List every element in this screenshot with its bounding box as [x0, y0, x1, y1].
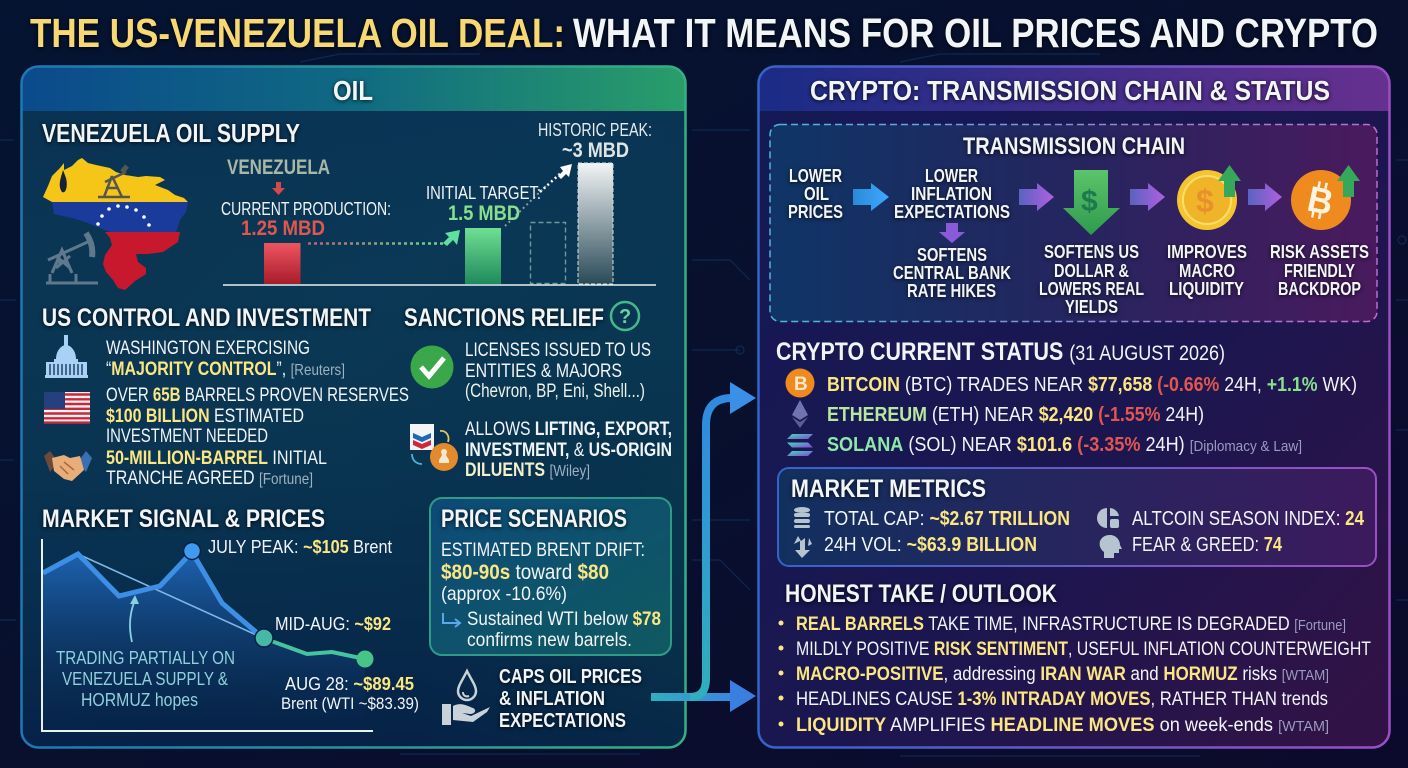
arrow: purple 2 [1130, 183, 1165, 211]
icon: bitcoin small: B [794, 374, 808, 395]
value: 3 mbd: ~3 MBD [562, 139, 629, 162]
text: majority control: “MAJORITY CONTROL”, [Reuters] [106, 359, 345, 380]
step: improves liquidity: IMPROVES [1167, 242, 1247, 262]
bar: historic peak [578, 163, 613, 284]
value: 1.5 mbd: 1.5 MBD [448, 202, 520, 225]
icon: handshake [44, 451, 92, 481]
arrow: target to peak [505, 164, 572, 226]
bar: initial target [465, 228, 501, 284]
step: softens rate hikes [893, 245, 1011, 301]
panel: oil [22, 66, 686, 748]
step: lower inflation expectations: INFLATION [911, 184, 992, 204]
icon: check [410, 346, 454, 388]
icon: us flag [44, 392, 90, 423]
text: diluents: DILUENTS [Wiley] [465, 460, 590, 481]
annotation: trading partially: VENEZUELA SUPPLY & [62, 668, 229, 689]
step: softens dollar: DOLLAR & [1054, 261, 1129, 281]
annotation: trading partially: HORMUZ hopes [81, 689, 198, 710]
text: entities: ENTITIES & MAJORS [465, 361, 622, 382]
arrow: annotation pointer [130, 595, 139, 642]
icon: database [794, 507, 810, 528]
icon: fear and greed head [1100, 535, 1122, 558]
step: lower oil prices: OIL [804, 184, 829, 204]
arrow: blue [853, 183, 889, 211]
metric: fear and greed: FEAR & GREED: 74 [1132, 534, 1283, 556]
heading: market signal: MARKET SIGNAL & PRICES [42, 505, 325, 533]
icon: capitol [45, 335, 88, 378]
title [30, 10, 1378, 56]
step: improves liquidity: MACRO [1179, 261, 1235, 281]
label: brent wti: Brent (WTI ~$83.39) [281, 694, 419, 713]
text: confirms: confirms new barrels. [467, 629, 632, 651]
icon: bitcoin up: B [1304, 178, 1337, 223]
label: current production: CURRENT PRODUCTION: [221, 199, 391, 219]
icon: chevron exchange [410, 424, 458, 471]
chart: brent price line [42, 539, 374, 731]
row: solana: SOLANA (SOL) NEAR $101.6 (-3.35% 24H) [Diplomacy & Law] [827, 434, 1302, 456]
arrow: production to target [308, 230, 460, 246]
point: mid-august [255, 629, 273, 647]
heading: current status: CRYPTO CURRENT STATUS (31 AUGUST 2026) [776, 338, 1225, 366]
panel heading: crypto: CRYPTO: TRANSMISSION CHAIN & STATUS [810, 75, 1330, 106]
annotation: trading partially: TRADING PARTIALLY ON [56, 647, 235, 668]
step: softens rate hikes: RATE HIKES [907, 281, 996, 301]
step: risk assets: RISK ASSETS [1270, 242, 1369, 262]
arrow: purple 3 [1248, 183, 1282, 211]
step: lower oil prices: LOWER [789, 166, 842, 186]
arrow: connector oil to crypto [651, 382, 756, 712]
step: lower inflation expectations [894, 166, 1010, 222]
value: 1.25 mbd: 1.25 MBD [241, 217, 325, 240]
step: improves liquidity [1167, 242, 1247, 299]
step: lower inflation expectations: EXPECTATIONS [894, 202, 1010, 222]
heading: venezuela oil supply: VENEZUELA OIL SUPPLY [42, 118, 300, 148]
heading: outlook: HONEST TAKE / OUTLOOK [785, 580, 1057, 608]
step: risk assets: FRIENDLY [1284, 261, 1355, 281]
icon: solana [787, 434, 813, 456]
annotation: trading partially [56, 647, 235, 710]
label: mid-aug: MID-AUG: ~$92 [275, 613, 391, 634]
text: companies: (Chevron, BP, Eni, Shell...) [465, 381, 645, 402]
heading: market metrics: MARKET METRICS [791, 475, 986, 503]
callout: caps oil prices [442, 666, 642, 732]
icon: question circle: ? [619, 306, 631, 328]
panel: price scenarios [430, 498, 671, 655]
heading: price scenarios: PRICE SCENARIOS [441, 505, 627, 533]
point: july peak [184, 542, 200, 560]
step: lower inflation expectations: LOWER [925, 166, 978, 186]
step: softens rate hikes: SOFTENS [917, 245, 987, 265]
metric: altcoin season: ALTCOIN SEASON INDEX: 24 [1132, 508, 1365, 530]
icon: hand with drop [442, 671, 490, 725]
section: crypto current status [776, 338, 1357, 456]
arrow: purple 1 [1019, 183, 1054, 211]
icon: bitcoin up [1291, 165, 1360, 230]
step: lower oil prices [788, 166, 843, 222]
chart: oil production bars [221, 120, 656, 285]
panel: transmission chain [770, 124, 1377, 322]
heading: sanctions relief: SANCTIONS RELIEF [404, 304, 604, 332]
icon: volume [794, 536, 812, 558]
text: investment origin: INVESTMENT, & US-ORIGIN [465, 440, 672, 461]
step: risk assets: BACKDROP [1278, 279, 1361, 299]
text: washington: WASHINGTON EXERCISING [106, 338, 310, 359]
arrow: purple down [939, 223, 965, 243]
text: tranche agreed: TRANCHE AGREED [Fortune] [106, 468, 313, 489]
icon: dollar down arrow: $ [1081, 185, 1098, 218]
step: softens rate hikes: CENTRAL BANK [893, 263, 1011, 283]
point: august 28 [356, 650, 374, 668]
bar: current production [264, 243, 300, 284]
panel heading: oil: OIL [333, 75, 373, 106]
bar: empty placeholder [530, 222, 566, 284]
text: investment value: $100 BILLION ESTIMATED [106, 406, 304, 427]
heading: us control: US CONTROL AND INVESTMENT [42, 304, 371, 332]
heading: transmission chain: TRANSMISSION CHAIN [963, 133, 1185, 160]
panel: crypto [758, 66, 1390, 748]
section: honest take outlook [778, 580, 1371, 736]
text: reserves: OVER 65B BARRELS PROVEN RESERVES [106, 385, 409, 406]
text: tranche: 50-MILLION-BARREL INITIAL [106, 448, 327, 469]
icon: gold coin up [1177, 165, 1241, 230]
icon: sub-arrow [443, 613, 460, 627]
icon: ethereum [792, 400, 808, 428]
arrow: down to current production [272, 182, 285, 195]
step: lower oil prices: PRICES [788, 202, 843, 222]
title: THE US-VENEZUELA OIL DEAL: [30, 10, 565, 56]
step: softens dollar [1039, 242, 1144, 317]
step: softens dollar: SOFTENS US [1044, 242, 1139, 262]
step: softens dollar: LOWERS REAL [1039, 279, 1144, 299]
label: aug 28: AUG 28: ~$89.45 [285, 673, 414, 694]
icon: dollar down arrow [1063, 170, 1120, 235]
metric: total cap: TOTAL CAP: ~$2.67 TRILLION [824, 508, 1070, 530]
section: us control and investment [42, 304, 409, 489]
bullet 1: REAL BARRELS TAKE TIME, INFRASTRUCTURE IS DEGRADED [Fortune] [796, 614, 1346, 635]
bullet 3: MACRO-POSITIVE, addressing IRAN WAR and HORMUZ risks [WTAM] [796, 664, 1329, 685]
callout: caps oil prices: EXPECTATIONS [499, 710, 626, 732]
row: bitcoin: BITCOIN (BTC) TRADES NEAR $77,658 (-0.66% 24H, +1.1% WK) [827, 374, 1357, 396]
text: drift range: $80-90s toward $80 [441, 560, 609, 584]
icon: gold coin up: $ [1196, 183, 1214, 219]
label: historic peak: HISTORIC PEAK: [538, 120, 652, 140]
text: estimated drift: ESTIMATED BRENT DRIFT: [441, 539, 645, 561]
text: sustained wti: Sustained WTI below $78 [467, 608, 661, 630]
text: investment needed: INVESTMENT NEEDED [106, 426, 268, 447]
label: july peak: JULY PEAK: ~$105 Brent [208, 536, 392, 557]
bullet 5: LIQUIDITY AMPLIFIES HEADLINE MOVES on week-ends [WTAM] [796, 715, 1329, 736]
icon: altcoin pie [1097, 508, 1119, 528]
text: licenses: LICENSES ISSUED TO US [465, 340, 651, 361]
label: venezuela: VENEZUELA [227, 156, 330, 179]
row: ethereum: ETHEREUM (ETH) NEAR $2,420 (-1.55% 24H) [827, 404, 1204, 426]
step: softens dollar: YIELDS [1065, 297, 1118, 317]
icon: venezuela map with oil pumps [43, 158, 188, 290]
panel: market metrics [778, 468, 1376, 566]
bullet 4: HEADLINES CAUSE 1-3% INTRADAY MOVES, RATHER THAN trends [796, 689, 1328, 710]
section: sanctions relief [404, 302, 672, 481]
callout: caps oil prices: CAPS OIL PRICES [499, 666, 642, 688]
icon: bitcoin small [786, 368, 814, 398]
step: risk assets [1270, 242, 1369, 299]
metric: 24h vol: 24H VOL: ~$63.9 BILLION [824, 534, 1037, 556]
label: initial target: INITIAL TARGET: [426, 183, 541, 203]
text: allows: ALLOWS LIFTING, EXPORT, [465, 419, 672, 440]
icon: question circle [611, 302, 639, 330]
text: drift percent: (approx -10.6%) [441, 583, 567, 605]
section: market signal and prices [42, 505, 419, 731]
step: improves liquidity: LIQUIDITY [1169, 279, 1244, 299]
callout: caps oil prices: & INFLATION [499, 688, 605, 710]
